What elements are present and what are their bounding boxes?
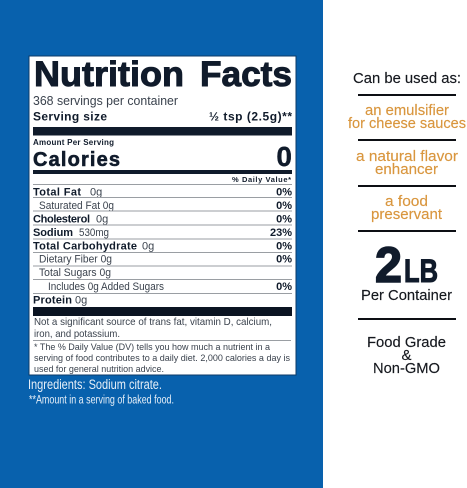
vitamins note: Not a significant source of trans fat, vitamin D, calcium, — [34, 316, 272, 328]
side column — [348, 70, 466, 377]
vitamins note: iron, and potassium. — [34, 328, 120, 340]
side heading: Can be used as: — [353, 70, 461, 87]
row: total carbohydrate: Total Carbohydrate — [33, 240, 137, 252]
row: total carbohydrate: 0% — [276, 240, 292, 252]
row: sodium: 530mg — [79, 227, 109, 239]
use: emulsifier: an emulsifier — [365, 102, 449, 119]
row: saturated fat — [39, 200, 292, 212]
blue background panel — [0, 0, 323, 488]
food grade note — [367, 334, 446, 377]
row: saturated fat: Saturated Fat 0g — [39, 200, 114, 212]
row: total sugars: Total Sugars 0g — [39, 267, 111, 279]
serving footnote: **Amount in a serving of baked food. — [29, 394, 174, 406]
row: protein: Protein — [33, 294, 72, 306]
row: added sugars: 0% — [276, 281, 292, 293]
row: cholesterol: 0% — [276, 214, 292, 226]
row: added sugars: Includes 0g Added Sugars — [48, 281, 164, 293]
row: sodium: Sodium — [33, 227, 73, 239]
thick rule bottom — [33, 307, 292, 316]
row: added sugars — [48, 281, 292, 293]
row: cholesterol: Cholesterol — [33, 214, 90, 226]
row: protein: 0g — [75, 294, 87, 306]
calories: 0 — [276, 141, 292, 172]
food grade note: & — [401, 347, 412, 364]
calories: Calories — [33, 149, 120, 171]
row: total carbohydrate: 0g — [142, 240, 154, 252]
serving size — [33, 110, 292, 124]
use: emulsifier: for cheese sauces — [348, 115, 466, 132]
food grade note: Food Grade — [367, 334, 446, 351]
thick rule — [33, 127, 292, 136]
container size: 2 — [375, 237, 402, 293]
use: preservative: preservant — [371, 206, 443, 223]
row: total fat: 0% — [276, 186, 292, 198]
title: Nutrition — [34, 55, 184, 94]
title — [34, 55, 292, 94]
vitamins note — [34, 316, 272, 340]
row: dietary fiber: Dietary Fiber 0g — [39, 254, 112, 266]
per container: Per Container — [361, 287, 452, 304]
use: flavor enhancer: a natural flavor — [356, 148, 458, 165]
nutrition facts label — [29, 55, 296, 375]
use: flavor enhancer — [356, 148, 458, 178]
food grade note: Non-GMO — [373, 360, 440, 377]
label background — [29, 56, 296, 375]
row: saturated fat: 0% — [276, 200, 292, 212]
daily value footnote — [34, 342, 290, 374]
use: preservative: a food — [385, 193, 428, 210]
servings per container: 368 servings per container — [33, 93, 179, 108]
medium rule — [33, 170, 292, 174]
row: total carbohydrate — [33, 240, 292, 252]
serving size: Serving size — [33, 110, 107, 124]
use: preservative — [371, 193, 443, 223]
ingredients: Ingredients: Sodium citrate. — [28, 377, 162, 392]
row: total fat: 0g — [90, 186, 102, 198]
amount per serving: Amount Per Serving — [33, 138, 114, 147]
row: total fat: Total Fat — [33, 186, 81, 198]
row: sodium — [33, 227, 292, 239]
container size — [375, 237, 438, 293]
row: dietary fiber: 0% — [276, 254, 292, 266]
row: dietary fiber — [39, 254, 292, 266]
use: flavor enhancer: enhancer — [375, 161, 438, 178]
title: Facts — [200, 55, 292, 94]
row: cholesterol: 0g — [96, 214, 108, 226]
daily value header: % Daily Value* — [232, 175, 291, 184]
daily value footnote: used for general nutrition advice. — [34, 364, 164, 374]
daily value footnote: serving of food contributes to a daily diet. 2,000 calories a day is — [34, 353, 290, 363]
row: total fat — [33, 186, 292, 198]
use: emulsifier — [348, 102, 466, 132]
row: cholesterol — [33, 214, 292, 226]
container size: LB — [404, 253, 438, 289]
serving size: ½ tsp (2.5g)** — [209, 110, 292, 124]
calories — [33, 141, 292, 172]
daily value footnote: * The % Daily Value (DV) tells you how much a nutrient in a — [34, 342, 271, 352]
row: sodium: 23% — [270, 227, 292, 239]
